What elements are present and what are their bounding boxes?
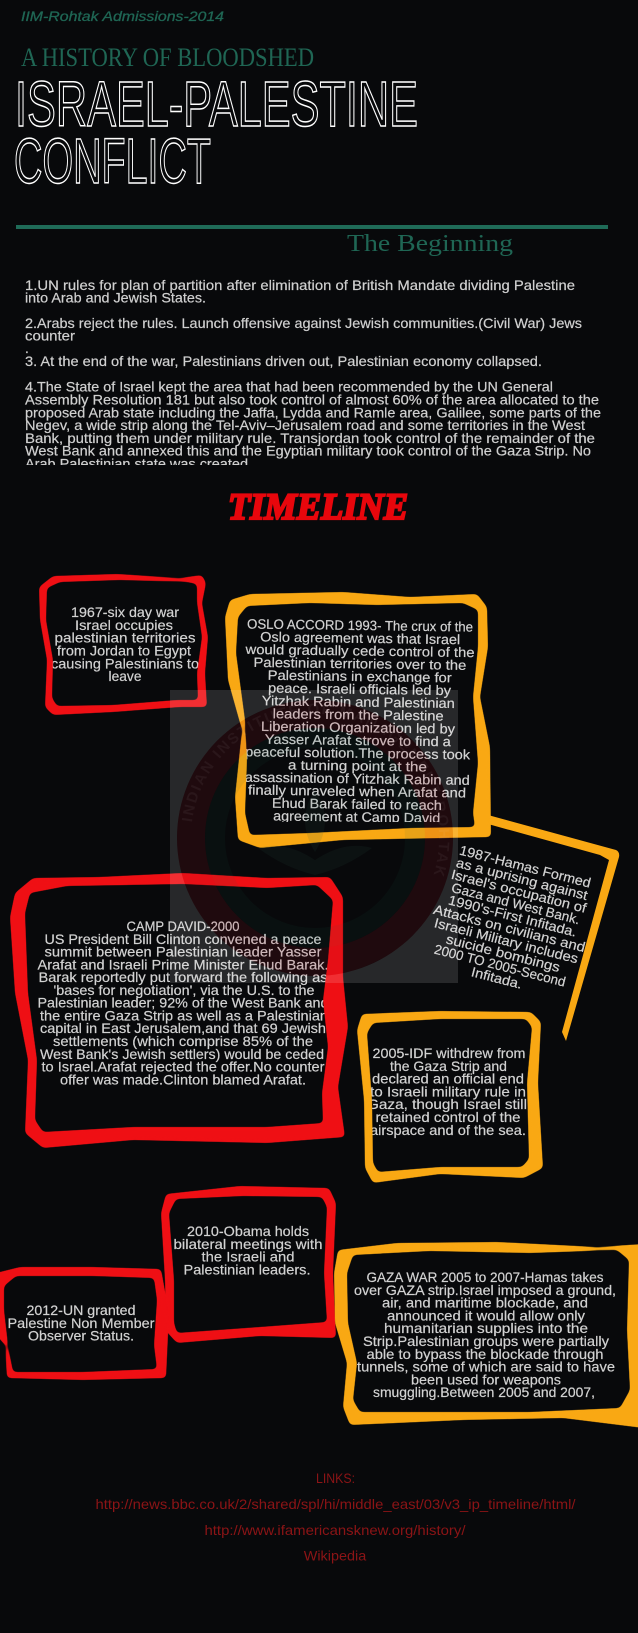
panel: 2010 Obama <box>161 1186 336 1343</box>
text: Hamas, rotated: 1990's-First Infitada. <box>447 892 578 940</box>
text: Camp David <box>38 919 328 1087</box>
text block: the beginning: Bank, putting them under military rule. Transjordan took control of the remainder of the <box>25 431 595 446</box>
text: Oslo: Yitzhak Rabin and Palestinian <box>262 693 455 711</box>
text: Hamas, rotated: 2000 TO 2005-Second <box>433 942 567 990</box>
frame: red <box>161 1186 336 1343</box>
text: 2005: to Israeli military rule in <box>370 1084 526 1099</box>
links: Wikipedia <box>304 1548 366 1564</box>
text: Gaza war: Strip.Palestinian groups were partially <box>363 1334 609 1349</box>
text: 2005: declared an official end <box>372 1072 524 1087</box>
text: 2005 <box>367 1046 527 1138</box>
text block: the beginning: 1.UN rules for plan of partition after elimination of British Mandate dividing Palestine <box>25 278 575 293</box>
panel: 2005 IDF <box>357 1011 543 1183</box>
frame: red <box>0 1267 169 1380</box>
text: 2005: airspace and of the sea. <box>370 1123 526 1138</box>
text: Camp David: offer was made.Clinton blamed Arafat. <box>60 1072 306 1087</box>
text block: the beginning: . <box>25 341 29 356</box>
text block: the beginning: proposed Arab state including the Jaffa, Lydda and Ramle area, Galilee, some parts of the <box>25 406 601 420</box>
panel: 2012 UN <box>0 1267 169 1380</box>
frame: red <box>10 873 348 1148</box>
frame: yellow <box>357 1011 543 1183</box>
text: 2005: Gaza, though Israel still <box>367 1097 527 1112</box>
text: 2010: 2010-Obama holds <box>187 1224 309 1239</box>
text: Gaza war: humanitarian supplies into the <box>384 1321 588 1336</box>
text: Camp David: US President Bill Clinton convened a peace <box>44 932 322 947</box>
text: 2005: retained control of the <box>376 1110 520 1125</box>
text: Oslo: OSLO ACCORD 1993- The crux of the <box>247 616 473 635</box>
text: Gaza war: been used for weapons <box>411 1372 561 1387</box>
text: Oslo: Yasser Arafat strove to find a <box>265 732 451 749</box>
title <box>14 68 418 197</box>
text: 1967: causing Palestinians to <box>51 656 199 671</box>
text: 1967: Israel occupies <box>75 618 173 633</box>
text: Gaza war: able to bypass the blockade through <box>366 1347 604 1362</box>
text block: the beginning: 3. At the end of the war, Palestinians driven out, Palestinian economy collapsed. <box>25 354 542 369</box>
text: 2005: 2005-IDF withdrew from <box>372 1046 526 1061</box>
text: Hamas, rotated: Israel's occupation of <box>450 867 588 916</box>
text: Camp David: West Bank's Jewish settlers) would be ceded <box>40 1047 324 1062</box>
text: Camp David: summit between Palestinian leader Yasser <box>44 944 322 960</box>
links: http://www.ifamericansknew.org/history/ <box>204 1522 466 1538</box>
section heading rule <box>16 225 608 229</box>
text: Oslo: Liberation Organization led by <box>261 719 455 737</box>
text: Camp David: the entire Gaza Strip as well as a Palestinian <box>40 1008 328 1023</box>
text: Gaza war: air, and maritime blockade, and <box>382 1296 588 1311</box>
subtitle: A HISTORY OF BLOODSHED <box>21 43 314 72</box>
text: Oslo: would gradually cede control of the <box>244 642 475 660</box>
watermark: institute seal <box>170 690 458 983</box>
text: 2010: bilateral meetings with <box>174 1237 322 1252</box>
text block: the beginning <box>25 278 601 471</box>
text: Hamas, rotated: Israeli Military includes <box>433 915 580 966</box>
text: Oslo: Palestinian territories over to the <box>253 655 466 673</box>
text block: the beginning: Negev, a wide strip along the Tel-Aviv–Jerusalem road and some territories in the West <box>25 418 585 433</box>
text: Oslo: peace. Israeli officials led by <box>268 681 451 698</box>
text: Camp David: settlements (which comprise 85% of the <box>53 1034 313 1049</box>
text: 2012 <box>8 1303 155 1344</box>
text block: the beginning: Assembly Resolution 181 but also took control of almost 60% of the area allocated to the <box>25 392 599 407</box>
text: Camp David: Barak reportedly put forward the following as <box>38 970 328 985</box>
text: Oslo: agreement at Camp David <box>273 808 440 826</box>
links: http://news.bbc.co.uk/2/shared/spl/hi/middle_east/03/v3_ip_timeline/html/ <box>96 1496 576 1512</box>
text block: the beginning: 2.Arabs reject the rules. Launch offensive against Jewish communities.(Civil War) Jews <box>25 316 582 331</box>
panel: Gaza war <box>334 1242 638 1430</box>
text block: the beginning: 4.The State of Israel kept the area that had been recommended by the UN General <box>25 380 553 395</box>
text: Oslo: finally unraveled when Arafat and <box>248 782 466 801</box>
text: 2005: the Gaza Strip and <box>390 1059 507 1074</box>
text: Camp David: capital in East Jerusalem,and that 69 Jewish <box>40 1021 326 1036</box>
text: 2010: the Israeli and <box>202 1250 294 1265</box>
text: 1967: 1967-six day war <box>71 605 179 620</box>
text: Hamas, rotated: suicide bombings <box>444 932 562 975</box>
text: Hamas, rotated: Gaza and West Bank. <box>450 880 581 927</box>
text: Gaza war <box>354 1270 616 1400</box>
text: Gaza war: announced it would allow only <box>387 1308 585 1323</box>
text: Oslo: Ehud Barak failed to reach <box>272 796 442 813</box>
text: Oslo: peaceful solution.The process took <box>245 744 470 762</box>
heading: The Beginning: The Beginning <box>347 231 513 257</box>
text: Oslo: assassination of Yitzhak Rabin and <box>245 770 470 788</box>
heading: timeline: TIMELINE <box>228 487 408 528</box>
text: Hamas, rotated: Infitada. <box>470 964 524 992</box>
frame: yellow flag <box>488 815 619 1041</box>
panel: Camp David <box>10 873 348 1148</box>
panel: 1987 Hamas <box>419 815 619 1041</box>
text: Hamas, rotated: Attacks on civilians and <box>432 902 587 955</box>
text: Gaza war: tunnels, some of which are said to have <box>357 1360 615 1375</box>
frame: red <box>39 574 208 715</box>
text: 1967: from Jordan to Egypt <box>57 644 191 658</box>
text block: the beginning: Arab Palestinian state was created <box>25 456 248 471</box>
text: Gaza war: smuggling.Between 2005 and 2007, <box>373 1385 595 1400</box>
links: LINKS: <box>316 1470 355 1486</box>
text: Oslo: leaders from the Palestine <box>273 706 444 724</box>
text: Hamas, rotated <box>419 840 603 1005</box>
text: Camp David: 'bases for negotiation', via the U.S. to the <box>54 983 314 998</box>
links <box>96 1470 576 1564</box>
text: Oslo: Oslo agreement was that Israel <box>260 629 460 647</box>
text: 2012: Palestine Non Member <box>8 1316 155 1331</box>
text: 2010 <box>174 1224 322 1277</box>
text: Camp David: Palestinian leader; 92% of the West Bank and <box>38 996 328 1011</box>
text: Camp David: Arafat and Israeli Prime Minister Ehud Barak. <box>38 957 328 972</box>
text: Oslo <box>242 616 475 826</box>
text: 2012: 2012-UN granted <box>26 1303 136 1318</box>
text: 1967: palestinian territories <box>54 631 196 646</box>
text: 1967 <box>51 605 199 684</box>
title: CONFLICT <box>14 125 211 197</box>
watermark: institute seal: INDIAN INSTITUTE OF MANAGEMENT ROHTAK <box>182 704 450 876</box>
panel: 1967 six day war <box>39 574 208 715</box>
text: Gaza war: GAZA WAR 2005 to 2007-Hamas takes <box>366 1270 604 1285</box>
text block: the beginning: into Arab and Jewish States. <box>25 291 206 306</box>
text: 1967: leave <box>108 669 142 684</box>
text: Gaza war: over GAZA strip.Israel imposed a ground, <box>354 1283 616 1298</box>
frame: yellow <box>334 1242 638 1430</box>
text: Hamas, rotated: as a uprising against <box>455 855 589 903</box>
frame: yellow <box>225 592 491 848</box>
text block: the beginning: counter <box>25 329 76 344</box>
text: Oslo: Palestinians in exchange for <box>268 668 452 685</box>
text: Hamas, rotated: 1987-Hamas Formed <box>458 843 592 891</box>
text: 2012: Observer Status. <box>28 1329 134 1344</box>
text: 2010: Palestinian leaders. <box>184 1262 310 1277</box>
text block: the beginning: West Bank and annexed this and the Egyptian military took control of the Gaza Strip. No <box>25 444 591 459</box>
header label: IIM-Rohtak Admissions-2014 <box>21 8 224 24</box>
text: Oslo: a turning point at the <box>288 758 427 774</box>
text: Camp David: to Israel.Arafat rejected the offer.No counter <box>42 1060 325 1074</box>
panel: Oslo accord <box>225 592 491 848</box>
title: ISRAEL-PALESTINE <box>15 68 418 140</box>
text: Camp David: CAMP DAVID-2000 <box>126 919 240 934</box>
